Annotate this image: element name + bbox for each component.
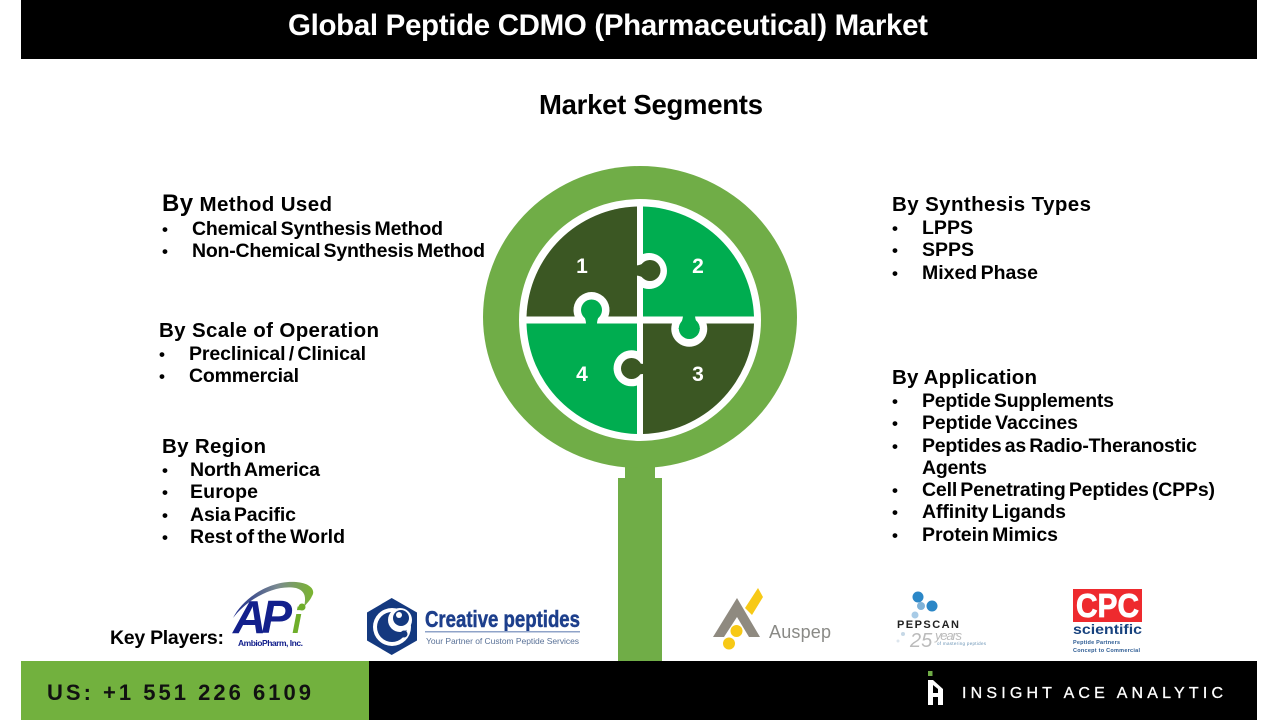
title banner	[21, 0, 1257, 59]
panel: by scale of operation: •	[159, 345, 165, 364]
panel: by application: Peptide Supplements	[922, 390, 1114, 412]
logo: Pepscan: of mastering peptides	[937, 641, 987, 646]
logo: AmbioPharm API: AP	[232, 591, 292, 643]
panel: by scale of operation: Commercial	[189, 365, 299, 387]
puzzle tab: piece 1 into 2	[636, 253, 667, 289]
panel: by application	[892, 366, 1215, 546]
magnifier ring	[483, 166, 797, 468]
footer phone panel: US: +1 551 226 6109	[47, 680, 311, 705]
logo: AmbioPharm API: AmbioPharm, Inc.	[238, 638, 303, 648]
panel: by application: By Application	[892, 366, 1037, 389]
panel: by synthesis types: By Synthesis Types	[892, 193, 1091, 216]
panel: by region: Rest of the World	[190, 526, 345, 548]
panel: by application: Peptides as Radio-Theranostic	[922, 435, 1197, 457]
heading: market segments: Market Segments	[539, 89, 763, 120]
panel: by region: North America	[190, 459, 320, 481]
logo: AmbioPharm API: i	[292, 600, 303, 641]
logo: Creative peptides: Your Partner of Custom Peptide Services	[426, 636, 579, 646]
panel: by method used: •	[162, 220, 168, 239]
puzzle piece 1	[526, 206, 637, 316]
panel: by region: •	[162, 506, 168, 525]
panel: by synthesis types: LPPS	[922, 217, 973, 239]
footer brand logo: INSIGHT ACE ANALYTIC	[962, 685, 1223, 702]
puzzle piece 2	[643, 206, 754, 316]
footer phone panel	[21, 661, 369, 720]
panel: by application: Affinity Ligands	[922, 501, 1066, 523]
puzzle piece 2: 2	[692, 255, 704, 278]
panel: by region: •	[162, 483, 168, 502]
puzzle tab: piece 4 into 1	[574, 292, 610, 324]
panel: by synthesis types	[892, 193, 1091, 284]
logo: CPC Scientific: Peptide Partners	[1073, 640, 1120, 646]
title banner: Global Peptide CDMO (Pharmaceutical) Market	[288, 9, 928, 42]
panel: by method used: •	[162, 242, 168, 261]
panel: by method used: By Method Used	[162, 190, 332, 217]
logo: CPC Scientific: Concept to Commercial	[1073, 648, 1140, 654]
panel: by region: By Region	[162, 435, 266, 458]
panel: by region: •	[162, 528, 168, 547]
footer bar	[21, 661, 1257, 720]
logo: Creative peptides	[367, 598, 580, 655]
panel: by method used: Non-Chemical Synthesis Method	[192, 240, 485, 262]
magnifier handle	[618, 460, 662, 662]
panel: by application: Peptide Vaccines	[922, 412, 1078, 434]
key players label: Key Players:	[110, 627, 224, 649]
magnifier graphic	[483, 166, 797, 662]
logo: Pepscan	[896, 592, 987, 652]
panel: by method used: Chemical Synthesis Method	[192, 218, 443, 240]
logo: Pepscan: PEPSCAN	[897, 619, 959, 631]
puzzle piece 1: 1	[576, 255, 588, 278]
panel: by scale of operation: Preclinical / Clinical	[189, 343, 366, 365]
panel: by application: •	[892, 392, 898, 411]
logo: AmbioPharm API	[232, 582, 313, 648]
puzzle piece 4	[526, 324, 637, 434]
panel: by synthesis types: •	[892, 219, 898, 238]
panel: by region: •	[162, 461, 168, 480]
panel: by application: •	[892, 437, 898, 456]
panel: by synthesis types: •	[892, 241, 898, 260]
panel: by application: •	[892, 481, 898, 500]
panel: by scale of operation: By Scale of Operation	[159, 319, 379, 342]
footer brand logo	[928, 671, 1223, 705]
puzzle tab: piece 3 into 4	[614, 350, 644, 386]
panel: by region	[162, 435, 345, 548]
panel: by application: Cell Penetrating Peptides (CPPs)	[922, 479, 1215, 501]
panel: by application: •	[892, 526, 898, 545]
panel: by application: •	[892, 414, 898, 433]
puzzle piece 3	[643, 324, 754, 434]
panel: by application: Protein Mimics	[922, 524, 1058, 546]
logo: Pepscan: 25	[909, 630, 933, 652]
panel: by method used	[162, 190, 485, 262]
panel: by region: Asia Pacific	[190, 504, 296, 526]
puzzle piece 3: 3	[692, 363, 704, 386]
panel: by scale of operation	[159, 319, 379, 387]
logo: CPC Scientific	[1073, 587, 1142, 654]
panel: by application: Agents	[922, 457, 987, 479]
panel: by synthesis types: •	[892, 264, 898, 283]
panel: by application: •	[892, 503, 898, 522]
logo: CPC Scientific: CPC	[1076, 587, 1139, 624]
logo: Auspep	[713, 588, 831, 650]
panel: by scale of operation: •	[159, 367, 165, 386]
panel: by synthesis types: Mixed Phase	[922, 262, 1038, 284]
logo: CPC Scientific: scientific	[1073, 621, 1142, 637]
logo: Creative peptides: Creative peptides	[425, 606, 580, 632]
puzzle piece 4: 4	[576, 363, 588, 386]
panel: by region: Europe	[190, 481, 258, 503]
panel: by synthesis types: SPPS	[922, 239, 974, 261]
logo: Pepscan: years	[934, 628, 962, 643]
logo: Auspep: Auspep	[769, 622, 831, 642]
puzzle tab: piece 2 into 3	[671, 315, 707, 347]
